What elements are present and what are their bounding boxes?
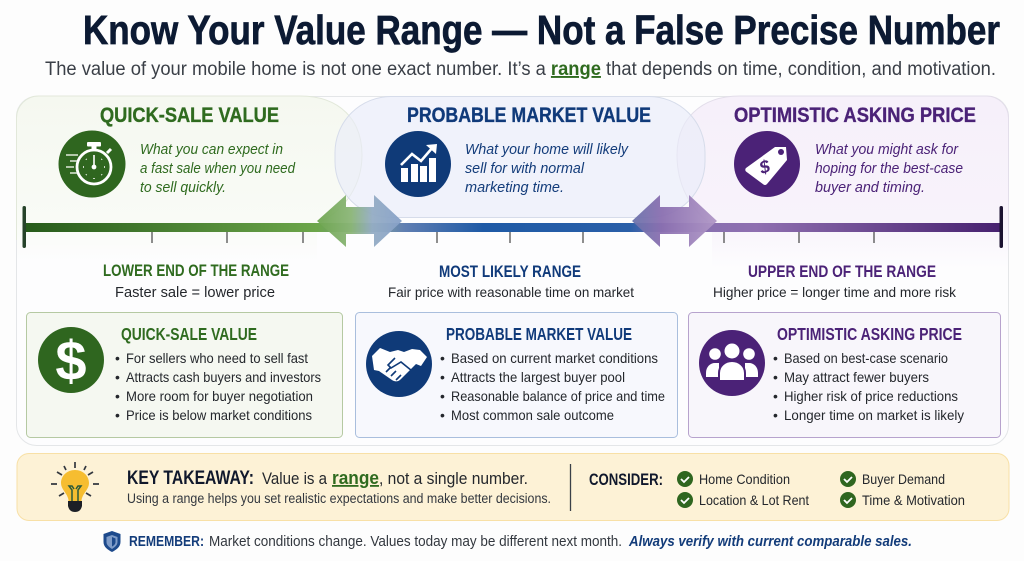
bullet list: • [115,350,120,366]
bullet list: • [773,350,778,366]
bullet list: • [115,369,120,385]
card heading: PROBABLE MARKET VALUE [446,324,632,344]
range label: lower end: Faster sale = lower price [115,285,275,301]
remember note: REMEMBER: [129,534,204,550]
consider label: CONSIDER: [589,470,663,489]
consider checklist: Buyer Demand [862,471,945,487]
icon: growth chart [385,131,451,197]
description: quick-sale: to sell quickly. [140,180,226,196]
bullet list: Most common sale outcome [451,407,614,423]
icon: shield [104,531,120,552]
bullet list: For sellers who need to sell fast [126,350,308,366]
description: probable: sell for with normal [465,161,585,177]
heading: quick-sale value: QUICK-SALE VALUE [100,103,279,127]
range label: upper end: UPPER END OF THE RANGE [748,263,936,281]
icon: handshake [366,331,432,397]
range label: most likely: MOST LIKELY RANGE [439,263,581,281]
bullet list: • [440,369,445,385]
consider checklist: Time & Motivation [862,492,965,508]
icon: light bulb [51,462,99,512]
bullet list: Attracts the largest buyer pool [451,369,625,385]
consider checklist [677,471,965,508]
description: probable: What your home will likely [465,142,629,158]
card: quick-sale value [26,312,342,438]
bullet list: • [440,388,445,404]
arrow: blue to purple overlap [632,195,717,247]
icon: buyers group [699,330,765,396]
subtitle: The value of your mobile home is not one exact number. It’s a range that depends on time, condition, and motivation. [45,59,996,80]
card: probable market value [356,312,678,438]
arrow: green to blue overlap [317,195,402,247]
description: optimistic [815,142,963,196]
remember note [104,531,912,552]
panel: optimistic asking price top [677,96,1008,268]
timeline: value range bar [22,206,1003,248]
heading: optimistic asking price: OPTIMISTIC ASKING PRICE [734,103,976,127]
panel: key takeaway band [17,454,1009,520]
range label: upper end: Higher price = longer time and more risk [713,284,957,300]
description: quick-sale [140,142,296,196]
bullet list: Price is below market conditions [126,407,312,423]
bullet list [773,350,964,423]
heading: probable market value: PROBABLE MARKET VALUE [407,103,651,127]
bullet list: Based on current market conditions [451,350,658,366]
range label: most likely [388,263,634,300]
bullet list: • [115,407,120,423]
range label: lower end: LOWER END OF THE RANGE [103,262,289,280]
icon: stopwatch [58,130,126,198]
remember note: Always verify with current comparable sales. [628,534,912,550]
key takeaway text [127,468,551,506]
key takeaway text: range [332,468,379,488]
consider checklist: Home Condition [699,471,790,487]
bullet list: Reasonable balance of price and time [451,388,665,404]
bullet list: More room for buyer negotiation [126,388,313,404]
bullet list: Longer time on market is likely [784,407,964,423]
bullet list [440,350,665,423]
card heading: OPTIMISTIC ASKING PRICE [777,324,962,344]
icon: dollar: $ [55,329,87,392]
bullet list: • [115,388,120,404]
panel: main range container [16,96,1008,446]
description: probable [465,142,629,196]
description: optimistic: buyer and timing. [815,180,925,196]
key takeaway text: , not a single number. [379,469,528,488]
icon: price tag [734,131,800,197]
bullet list: • [773,407,778,423]
icon: dollar [38,327,104,393]
key takeaway text: Value is a [262,469,327,488]
bullet list: • [440,350,445,366]
description: optimistic: What you might ask for [815,142,959,158]
description: quick-sale: What you can expect in [140,142,283,158]
bullet list [115,350,321,423]
card heading: QUICK-SALE VALUE [121,324,257,344]
description: quick-sale: a fast sale when you need [140,161,296,177]
consider checklist: Location & Lot Rent [699,492,809,508]
range label: lower end [103,262,289,301]
key takeaway text: KEY TAKEAWAY: [127,468,254,489]
bullet list: Higher risk of price reductions [784,388,958,404]
bullet list: • [773,388,778,404]
bullet list: • [773,369,778,385]
bullet list: May attract fewer buyers [784,369,929,385]
description: probable: marketing time. [465,180,564,196]
panel: probable market value top [335,96,705,218]
bullet list: • [440,407,445,423]
card: optimistic asking price [688,312,1000,438]
panel: quick-sale value top [16,96,362,262]
bullet list: Attracts cash buyers and investors [126,369,321,385]
range label: upper end [713,263,957,300]
key takeaway text: Using a range helps you set realistic expectations and make better decisions. [127,491,551,506]
remember note: Market conditions change. Values today may be different next month. [209,534,622,550]
bullet list: Based on best-case scenario [784,350,948,366]
icon: price tag: $ [756,156,773,178]
range label: most likely: Fair price with reasonable time on market [388,284,634,300]
description: optimistic: hoping for the best-case [815,161,963,177]
